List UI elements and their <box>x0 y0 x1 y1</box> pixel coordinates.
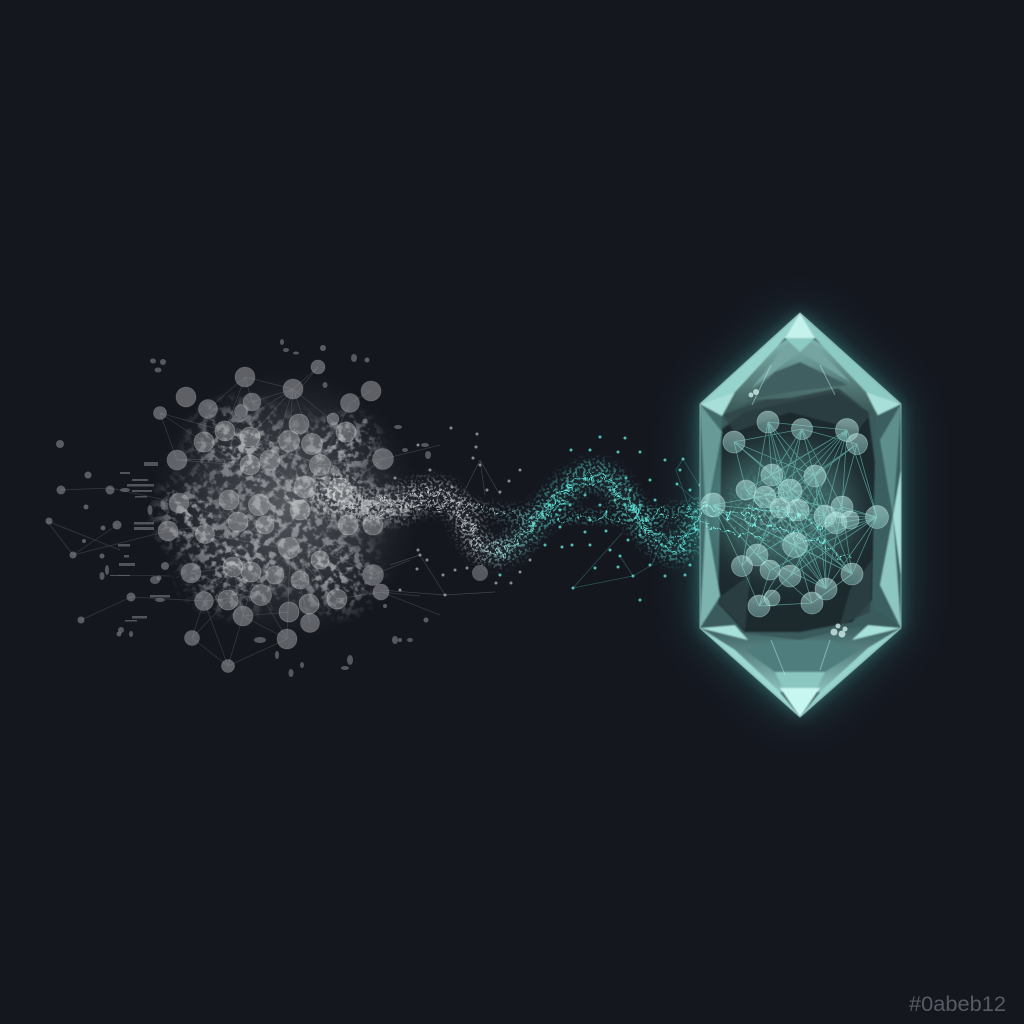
teal network lines <box>573 459 705 588</box>
crystal facet highlight lines <box>700 313 901 717</box>
panel: scattered data cloud <box>46 339 488 677</box>
central node soft haze <box>715 448 855 572</box>
panel: particle wave stream <box>345 428 710 600</box>
network lines <box>47 367 440 666</box>
stream entering crystal <box>700 508 850 560</box>
crystal network lines <box>713 422 877 606</box>
sphere nodes: inner <box>194 414 383 622</box>
crystal facets, softly blurred <box>700 313 901 717</box>
small scattered nodes <box>46 345 428 642</box>
sphere nodes: outer <box>154 360 394 672</box>
flat strand halo <box>345 500 705 518</box>
crystal outer glow <box>700 313 901 717</box>
wave strand <box>345 474 705 553</box>
scattered grey particles <box>395 428 530 595</box>
inner mid-dark facets <box>716 388 872 630</box>
grey network lines <box>380 460 500 595</box>
right side facets <box>872 404 901 628</box>
watermark label: #0abeb12 <box>909 993 1006 1016</box>
dense shard texture <box>145 390 415 625</box>
crystal sphere nodes <box>701 411 888 617</box>
top facets <box>700 340 901 416</box>
glitch data bars <box>110 462 170 622</box>
bright core <box>295 462 375 526</box>
stream soft glow <box>345 474 705 553</box>
bottom facets <box>700 626 901 692</box>
small cluster near crystal base <box>748 389 848 638</box>
inner dark chamber <box>715 392 876 632</box>
flat strand <box>345 500 705 518</box>
central node speckle <box>718 460 842 560</box>
stream texture halo <box>345 474 705 553</box>
crystal body <box>700 313 901 717</box>
shard fragments <box>100 339 488 677</box>
second wave strand <box>345 480 710 545</box>
cloud haze <box>150 370 420 640</box>
panel: crystal <box>700 313 901 717</box>
second bright trail <box>337 494 433 530</box>
crystal edge glow <box>700 313 901 717</box>
scattered teal particles <box>500 437 700 600</box>
left side facets <box>700 404 722 628</box>
